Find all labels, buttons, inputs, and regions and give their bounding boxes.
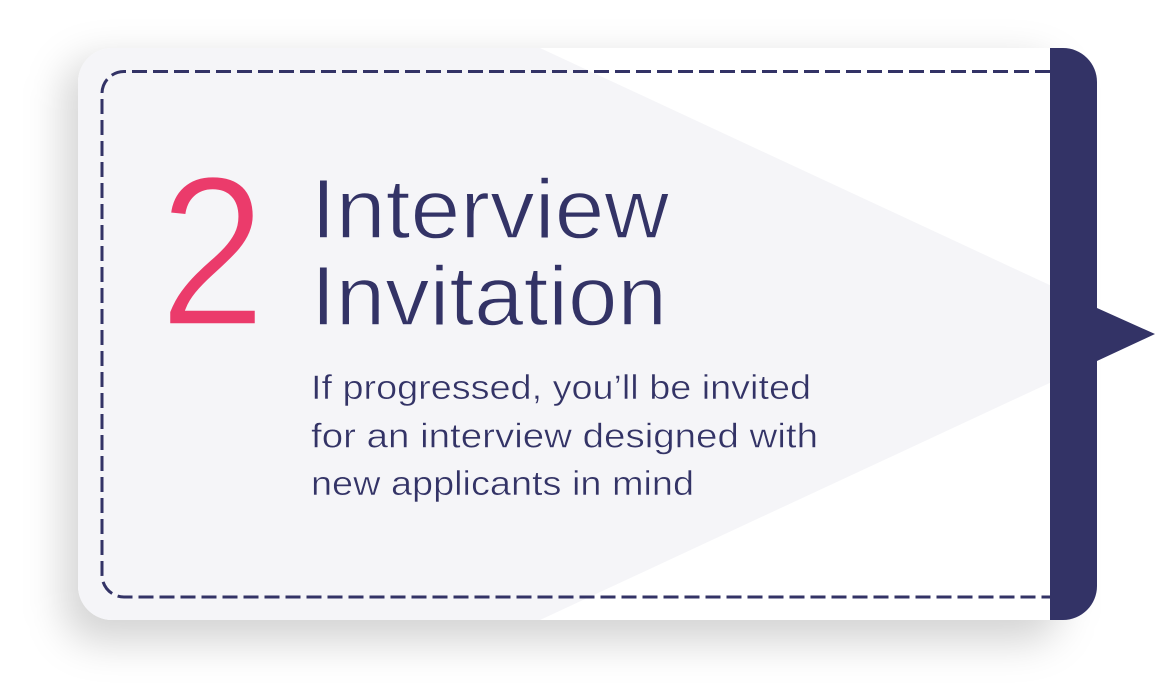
description: new applicants in mind [311, 465, 694, 503]
dashed inner border [102, 72, 1050, 597]
navy side bar with pointer [1050, 48, 1155, 620]
grey arrow panel [78, 48, 1155, 620]
heading: Invitation [311, 249, 667, 343]
description [311, 369, 818, 503]
card drop shadow [64, 60, 1060, 642]
card background [78, 48, 1097, 620]
description: If progressed, you’ll be invited [311, 369, 811, 407]
heading [311, 162, 669, 343]
description: for an interview designed with [311, 418, 818, 456]
heading: Interview [311, 162, 669, 256]
step number: 2 [159, 132, 266, 371]
